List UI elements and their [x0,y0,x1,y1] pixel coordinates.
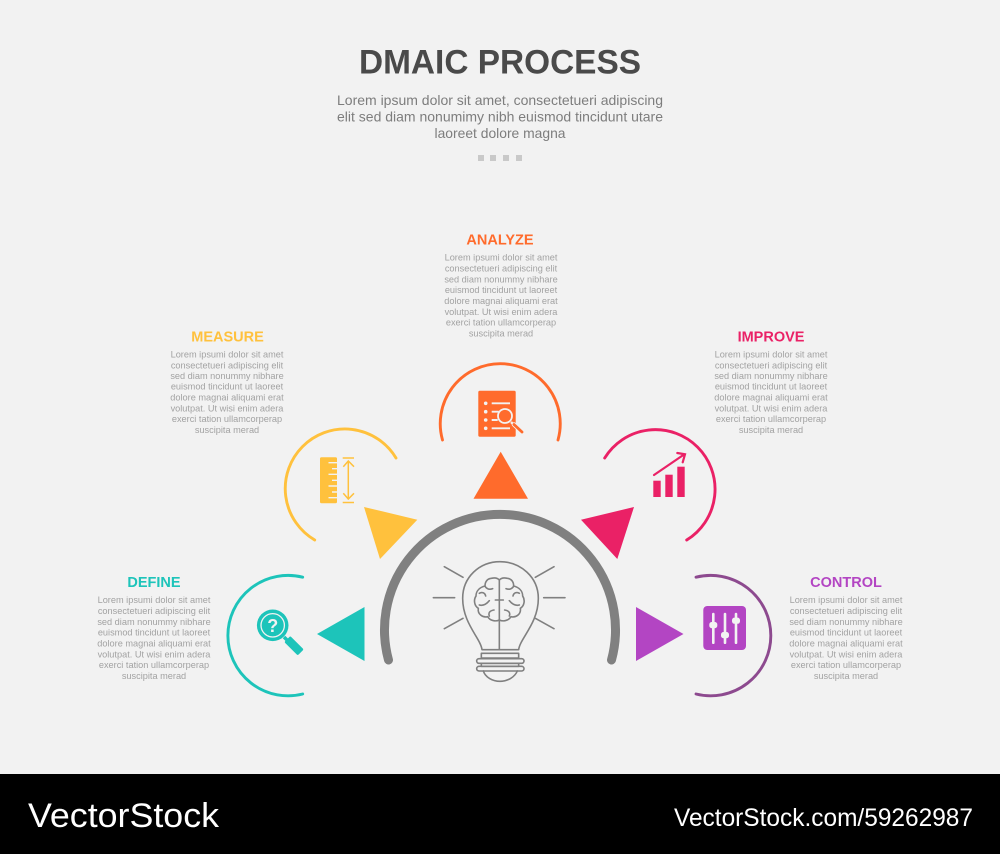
control text block: exerci tation ullamcorperap [791,660,901,670]
control heading: CONTROL [810,575,882,591]
measure text block: volutpat. Ut wisi enim adera [171,404,284,414]
define text block: suscipita merad [122,671,186,681]
define text block [97,595,211,681]
measure text block: sed diam nonummy nibhare [170,371,284,381]
improve arc [605,430,715,540]
panel: control [636,575,903,696]
icon: magnifier with question mark: ? [267,616,278,636]
analyze text block: euismod tincidunt ut laoreet [445,285,558,295]
subtitle text block [337,92,663,141]
control text block: suscipita merad [814,671,878,681]
measure text block: exerci tation ullamcorperap [172,414,282,424]
analyze text block: volutpat. Ut wisi enim adera [445,307,558,317]
panel: improve [581,330,828,559]
measure text block: euismod tincidunt ut laoreet [171,382,284,392]
measure text block [170,350,284,435]
improve text block: dolore magnai aliquami erat [714,392,828,402]
define text block: consectetueri adipiscing elit [98,606,211,616]
pagination dots [478,155,522,161]
define text block: volutpat. Ut wisi enim adera [98,650,211,660]
control text block: euismod tincidunt ut laoreet [790,628,903,638]
footer image id: VectorStock.com/59262987 [674,804,973,832]
analyze text block: dolore magnai aliquami erat [444,296,558,306]
analyze text block: suscipita merad [469,328,533,338]
panel: measure [170,330,417,559]
subtitle text block: elit sed diam nonumimy nibh euismod tincidunt utare [337,108,663,124]
icon: light bulb with brain [433,562,565,681]
define text block: Lorem ipsumi dolor sit amet [98,595,211,605]
control triangle [636,607,684,661]
improve heading: IMPROVE [738,330,805,346]
improve text block: sed diam nonummy nibhare [714,371,828,381]
define arc [228,575,303,696]
improve text block: volutpat. Ut wisi enim adera [715,404,828,414]
improve text block: euismod tincidunt ut laoreet [715,382,828,392]
control text block [789,595,903,681]
subtitle text block: laoreet dolore magna [434,125,566,141]
panel: define [97,575,364,696]
icon: sliders [703,606,746,650]
define heading: DEFINE [127,575,181,591]
title: DMAIC PROCESS [359,44,641,82]
control arc [696,575,771,696]
analyze text block: sed diam nonummy nibhare [444,274,558,284]
analyze triangle [474,452,528,499]
improve text block: suscipita merad [739,425,803,435]
improve text block [714,350,828,435]
icon: rising bar chart [653,453,685,497]
analyze heading: ANALYZE [466,232,534,248]
panel: analyze [440,232,560,499]
footer band [0,774,1000,854]
analyze text block: Lorem ipsumi dolor sit amet [445,252,558,262]
control text block: Lorem ipsumi dolor sit amet [790,595,903,605]
measure heading: MEASURE [191,330,264,346]
measure arc [285,429,396,540]
analyze text block: exerci tation ullamcorperap [446,318,556,328]
analyze text block [444,252,558,338]
icon: magnifier with question mark [257,610,304,655]
define triangle [317,607,364,661]
define text block: dolore magnai aliquami erat [97,638,211,648]
footer logo: VectorStock [28,797,220,835]
icon: ruler and arrow [320,457,354,503]
icon: report with magnifier [478,391,522,437]
improve text block: consectetueri adipiscing elit [715,360,828,370]
subtitle text block: Lorem ipsum dolor sit amet, consectetueri adipiscing [337,92,663,108]
define text block: exerci tation ullamcorperap [99,660,209,670]
control text block: consectetueri adipiscing elit [790,606,903,616]
define text block: euismod tincidunt ut laoreet [98,628,211,638]
analyze text block: consectetueri adipiscing elit [445,264,558,274]
improve text block: exerci tation ullamcorperap [716,414,826,424]
improve triangle [581,507,634,559]
control text block: sed diam nonummy nibhare [789,617,903,627]
central grey arch [384,514,616,660]
define text block: sed diam nonummy nibhare [97,617,211,627]
improve text block: Lorem ipsumi dolor sit amet [715,350,828,360]
analyze arc [440,364,560,440]
measure text block: suscipita merad [195,425,259,435]
measure text block: Lorem ipsumi dolor sit amet [171,350,284,360]
measure text block: consectetueri adipiscing elit [171,360,284,370]
measure text block: dolore magnai aliquami erat [170,392,284,402]
measure triangle [364,507,417,559]
control text block: dolore magnai aliquami erat [789,638,903,648]
control text block: volutpat. Ut wisi enim adera [790,650,903,660]
